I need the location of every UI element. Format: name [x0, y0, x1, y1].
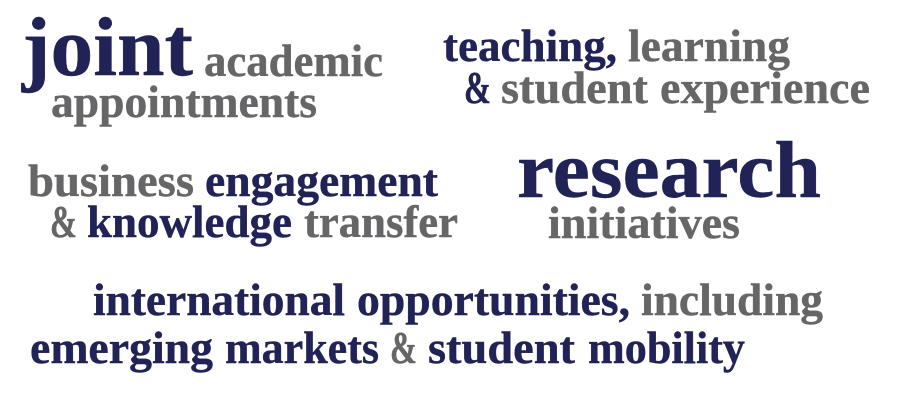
text block: business engagement and knowledge transfer: transfer [304, 197, 458, 247]
text block: business engagement and knowledge transfer: engagement [205, 156, 438, 206]
text block: research initiatives: initiatives [548, 198, 740, 248]
text block: international opportunities including emerging markets and student mobility: emerging [30, 323, 214, 373]
text block: international opportunities including emerging markets and student mobility: including [641, 275, 823, 325]
text block: teaching, learning and student experience: learning [628, 21, 790, 71]
text block: joint academic appointments: appointments [51, 77, 317, 127]
text block: joint academic appointments: academic [204, 36, 383, 86]
text block: international opportunities including emerging markets and student mobility: markets [225, 323, 379, 373]
text block: international opportunities including emerging markets and student mobility: student [428, 323, 575, 373]
text block: joint academic appointments [21, 1, 383, 127]
text block: business engagement and knowledge transfer: & [50, 197, 77, 247]
text block: international opportunities including emerging markets and student mobility: & [390, 323, 417, 373]
text block: research initiatives: research [517, 127, 821, 215]
text block: joint academic appointments: joint [21, 1, 193, 94]
text block: business engagement and knowledge transfer [28, 156, 458, 247]
text block: business engagement and knowledge transfer: business [28, 156, 194, 206]
text block: business engagement and knowledge transfer: knowledge [87, 197, 292, 247]
text block: teaching, learning and student experience: teaching, [443, 21, 617, 71]
text block: teaching, learning and student experience: & [464, 63, 491, 113]
text block: research initiatives [517, 127, 821, 248]
text block: international opportunities including emerging markets and student mobility: opportunities, [357, 275, 630, 325]
text block: international opportunities including emerging markets and student mobility [30, 275, 823, 373]
text block: international opportunities including emerging markets and student mobility: international [93, 275, 345, 325]
text block: teaching, learning and student experience: experience [660, 63, 870, 113]
text block: teaching, learning and student experience [443, 21, 870, 113]
text block: teaching, learning and student experience: student [501, 63, 648, 113]
text block: international opportunities including emerging markets and student mobility: mobility [588, 323, 745, 373]
